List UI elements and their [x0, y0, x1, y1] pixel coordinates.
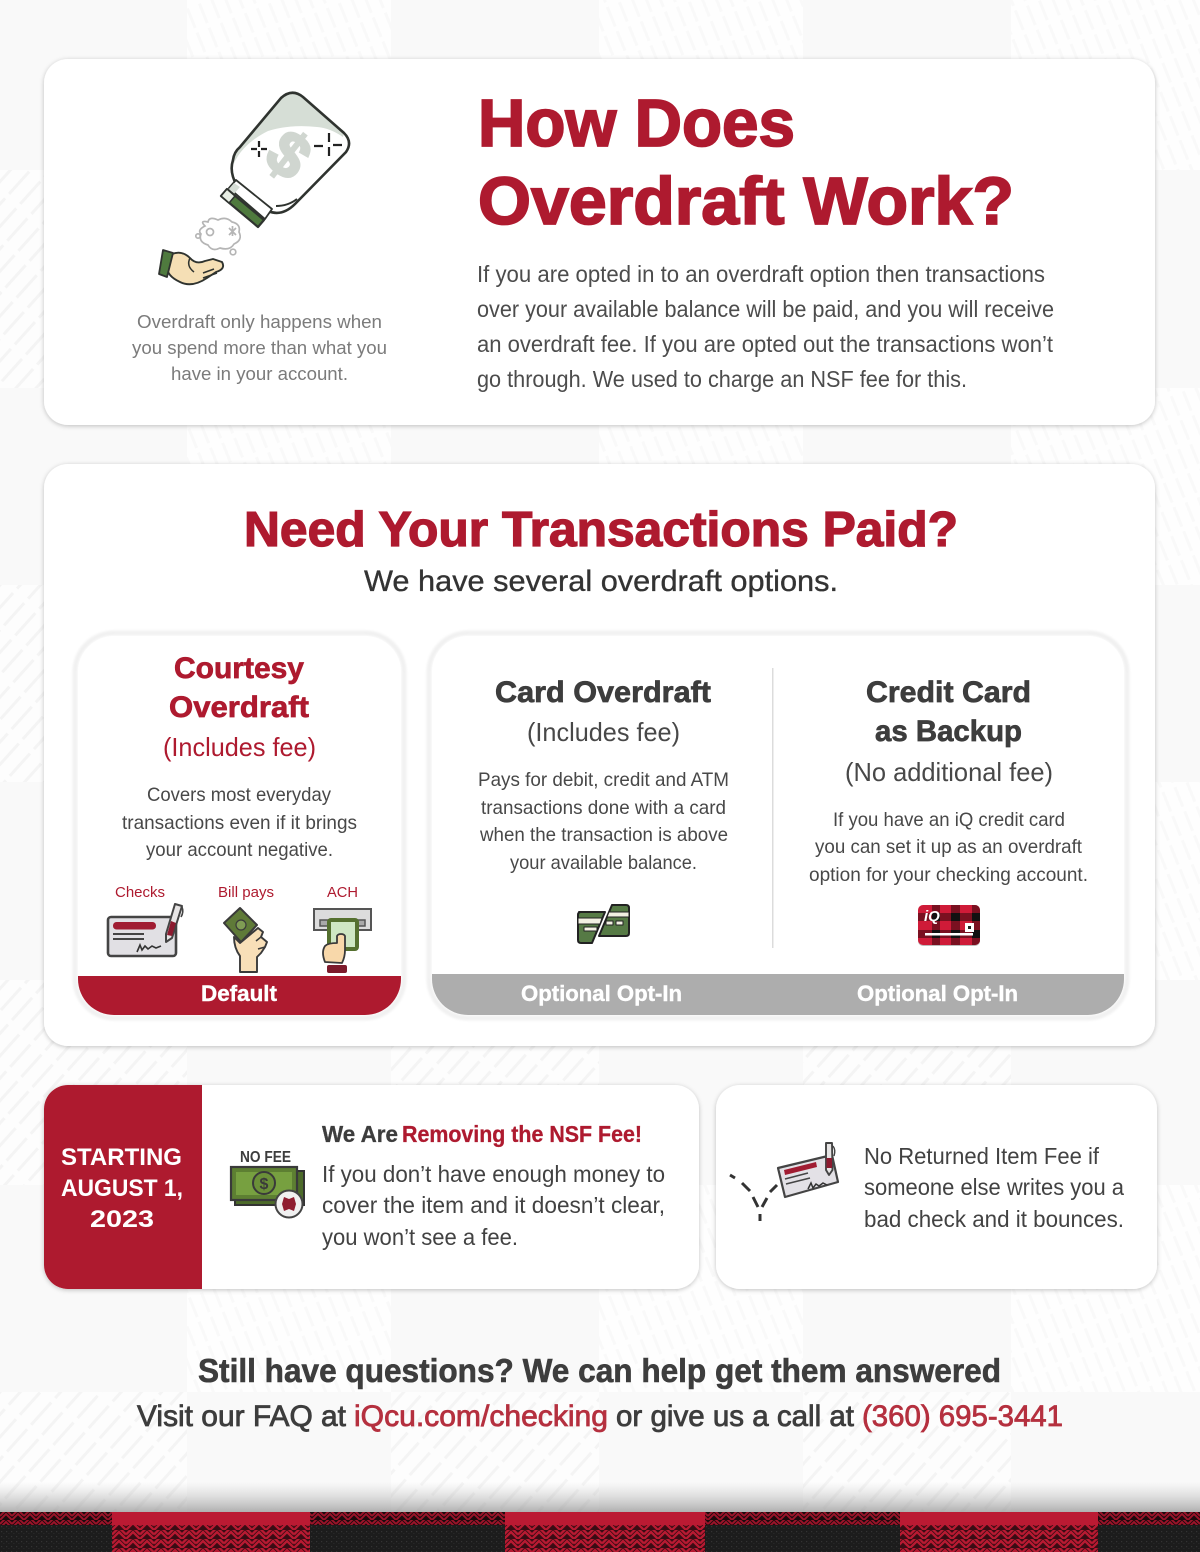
text: no returned item fee	[864, 1143, 1125, 1232]
caption: overdraft explanation: Overdraft only happens when	[137, 311, 382, 332]
date block: STARTING	[61, 1144, 182, 1171]
text: no returned item fee: bad check and it bounces.	[864, 1206, 1124, 1232]
text: overdraft description: go through. We used to charge an NSF fee for this.	[477, 366, 967, 392]
card title: courtesy overdraft	[169, 652, 309, 724]
date block: 2023	[90, 1206, 154, 1233]
panel: no returned item fee	[716, 1085, 1157, 1289]
icon: no fee money: NO FEE	[240, 1149, 291, 1166]
title: how does overdraft work: How Does	[478, 86, 795, 161]
panel: overdraft options	[44, 464, 1155, 1046]
title: how does overdraft work: Overdraft Work?	[478, 164, 1014, 239]
description: Covers most everyday	[147, 784, 331, 806]
description	[809, 809, 1088, 886]
icon: bottle pouring into hand: $	[253, 115, 325, 194]
option title	[866, 676, 1031, 748]
text: no returned item fee: someone else writes you a	[864, 1174, 1125, 1200]
card: courtesy overdraft	[75, 633, 404, 1018]
footer: questions heading: Still have questions? We can help get them answered	[198, 1352, 1001, 1389]
tag: default: Default	[201, 981, 278, 1006]
text: nsf explanation: you won’t see a fee.	[322, 1224, 518, 1250]
footer: contact details: or give us a call at	[616, 1400, 855, 1433]
fee note: (Includes fee)	[163, 732, 316, 762]
footer: contact details: (360) 695-3441	[862, 1400, 1063, 1433]
tags: optional opt-in: Optional Opt-In	[857, 981, 1018, 1006]
heading: removing the nsf fee: Removing the NSF Fee!	[402, 1121, 642, 1147]
title: how does overdraft work	[478, 86, 1014, 239]
description: you can set it up as an overdraft	[815, 836, 1083, 858]
fee note: (No additional fee)	[845, 757, 1053, 787]
card: optional overdraft options	[429, 633, 1127, 1018]
caption: overdraft explanation: you spend more than what you	[132, 337, 387, 358]
date block: AUGUST 1,	[61, 1175, 183, 1202]
text: overdraft description	[477, 261, 1054, 392]
tag: default	[78, 976, 401, 1015]
icon: bouncing check	[730, 1143, 838, 1221]
description	[122, 784, 357, 861]
icon: split card	[578, 905, 629, 943]
label: checks: Checks	[115, 884, 165, 901]
option title: Credit Card	[866, 676, 1031, 709]
description: transactions done with a card	[481, 797, 726, 819]
icon: bottle pouring into hand	[159, 93, 349, 284]
text: overdraft description: an overdraft fee. If you are opted out the transactions won’t	[477, 331, 1054, 357]
option: credit card as backup	[809, 676, 1088, 946]
label: bill pays: Bill pays	[218, 884, 274, 901]
option title: as Backup	[875, 715, 1022, 748]
description: If you have an iQ credit card	[833, 809, 1065, 831]
icon: iq plaid card: iQ	[924, 908, 940, 925]
icon: atm with cash	[314, 909, 371, 973]
icon: iq plaid card	[918, 905, 980, 946]
text: nsf explanation: If you don’t have enough money to	[322, 1161, 665, 1187]
icon: check and pen	[108, 904, 183, 956]
description: when the transaction is above	[479, 824, 728, 846]
text: no returned item fee: No Returned Item Fee if	[864, 1143, 1099, 1169]
subheading: We have several overdraft options.	[364, 565, 838, 598]
icon: no fee money: $	[260, 1176, 269, 1193]
text: overdraft description: If you are opted in to an overdraft option then transactions	[477, 261, 1045, 287]
label: ach: ACH	[327, 884, 358, 901]
panel: removing the nsf fee	[44, 1085, 699, 1289]
description: your available balance.	[510, 852, 697, 874]
date block	[44, 1085, 202, 1289]
icon: hand with bill	[224, 908, 267, 972]
description	[478, 769, 729, 874]
heading: removing the nsf fee: We Are	[322, 1121, 398, 1147]
card title: courtesy overdraft: Overdraft	[169, 691, 309, 724]
fee note: (Includes fee)	[527, 717, 680, 747]
text: nsf explanation	[322, 1161, 665, 1250]
card title: courtesy overdraft: Courtesy	[174, 652, 304, 685]
tags: optional opt-in	[432, 974, 1124, 1015]
tags: optional opt-in: Optional Opt-In	[521, 981, 682, 1006]
caption: overdraft explanation: have in your account.	[171, 363, 348, 384]
text: nsf explanation: cover the item and it doesn’t clear,	[322, 1192, 665, 1218]
description: Pays for debit, credit and ATM	[478, 769, 729, 791]
caption: overdraft explanation	[132, 311, 387, 384]
description: your account negative.	[146, 839, 333, 861]
heading: need your transactions paid: Need Your Transactions Paid?	[244, 503, 958, 557]
description: transactions even if it brings	[122, 812, 357, 834]
footer: contact details: Visit our FAQ at	[137, 1400, 347, 1433]
plaid footer band	[0, 1512, 1200, 1552]
option: card overdraft	[478, 676, 729, 943]
footer: contact details: iQcu.com/checking	[354, 1400, 608, 1433]
icon: no fee money	[231, 1149, 304, 1218]
panel: how overdraft works	[44, 59, 1155, 425]
text: overdraft description: over your available balance will be paid, and you will receive	[477, 296, 1054, 322]
option title: Card Overdraft	[495, 676, 711, 709]
description: option for your checking account.	[809, 864, 1088, 886]
